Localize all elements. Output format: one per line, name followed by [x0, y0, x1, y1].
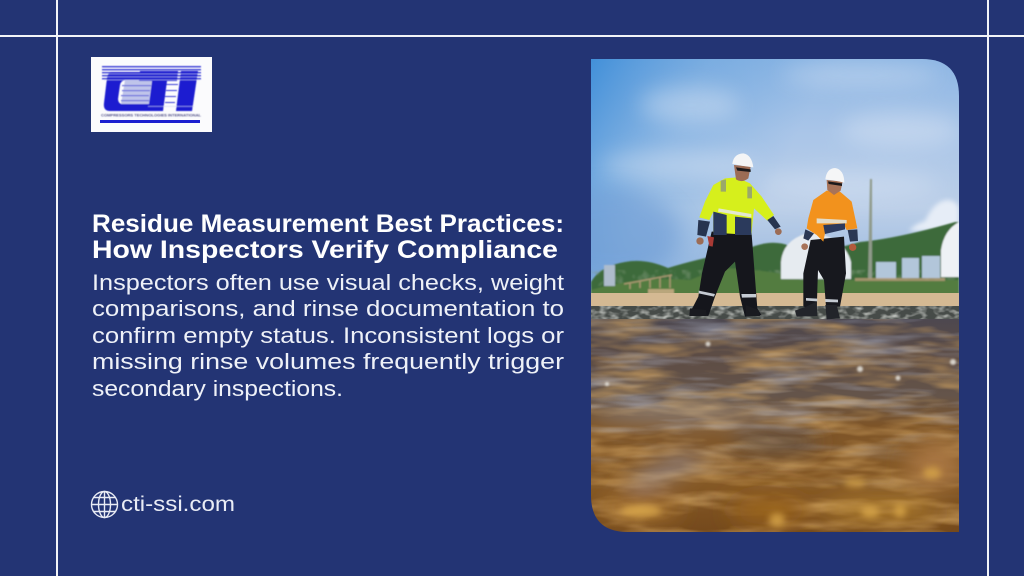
C: [104, 72, 152, 111]
I: [176, 71, 198, 111]
inspector in yellow jacket: [689, 153, 782, 317]
body text: missing rinse volumes frequently trigger: [92, 349, 565, 374]
body text: confirm empty status. Inconsistent logs or: [92, 323, 565, 348]
website link: [92, 492, 235, 518]
inspector in orange jacket: [795, 168, 858, 319]
body text: [92, 270, 565, 401]
sandy bank: [591, 293, 959, 306]
water: [590, 319, 963, 532]
body text: comparisons, and rinse documentation to: [92, 296, 564, 321]
cylindrical tanks: [876, 256, 940, 279]
heading: How Inspectors Verify Compliance: [92, 236, 558, 264]
logo tagline: COMPRESSORS TECHNOLOGIES INTERNATIONAL: [101, 112, 202, 118]
heading: Residue Measurement Best Practices:: [92, 210, 564, 238]
photo: inspectors at the water's edge: [591, 59, 959, 532]
fences: [624, 275, 672, 289]
T: [139, 71, 178, 111]
sky: [591, 59, 959, 293]
body text: secondary inspections.: [92, 376, 343, 401]
logo: CTI: [91, 57, 212, 132]
speed stripes behind the letters: [102, 66, 201, 103]
gravel edge: [591, 306, 959, 319]
body text: Inspectors often use visual checks, weight: [92, 270, 565, 295]
background: treeline and tanks: [591, 179, 959, 298]
website text: cti-ssi.com: [121, 492, 235, 516]
icon: globe: [92, 492, 118, 518]
highlights on letters: [104, 74, 200, 107]
figures: drawn in a 3x coordinate space: [689, 153, 858, 319]
logo wordmark: [102, 66, 201, 111]
heading: [92, 210, 564, 264]
storage spheres: [781, 232, 851, 279]
